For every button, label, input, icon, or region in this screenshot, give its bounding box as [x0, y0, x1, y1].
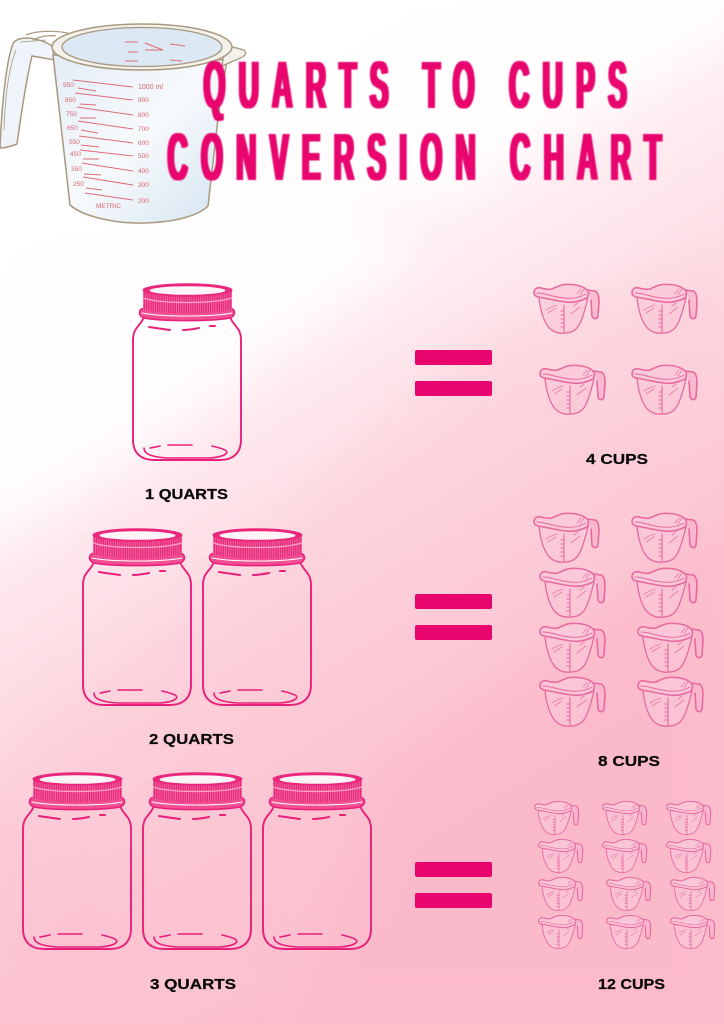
label: 2 quarts: 2 QUARTS [149, 731, 234, 748]
icon: large measuring cup [0, 24, 246, 223]
row 3 [23, 772, 715, 993]
label: 1 quarts: 1 QUARTS [145, 486, 228, 503]
label: 8 cups: 8 CUPS [598, 753, 660, 770]
row 1 [133, 283, 697, 503]
equals sign [415, 862, 492, 908]
measurement markings: 450 [70, 151, 81, 158]
equals sign [415, 594, 492, 640]
label: 4 cups: 4 CUPS [586, 451, 648, 468]
title: CONVERSION CHART [168, 119, 661, 194]
icons: two jars [83, 528, 311, 705]
row 2 [83, 513, 703, 770]
measurement markings: 900 [138, 97, 149, 104]
icons: twelve cups [535, 802, 715, 949]
title: QUARTS TO CUPS [204, 47, 627, 122]
title [168, 47, 661, 194]
measurement markings: 250 [73, 181, 84, 188]
measurement markings: 600 [138, 140, 149, 147]
equals sign [415, 350, 492, 396]
measurement markings: 500 [138, 153, 149, 160]
measurement markings: 650 [67, 125, 78, 132]
measurement markings: 950 [63, 82, 74, 89]
measurement markings: 1000 ml [138, 84, 163, 91]
measurement markings: METRIC [96, 203, 121, 210]
icons: four cups [534, 284, 697, 414]
measurement markings: 400 [138, 168, 149, 175]
measurement markings: 550 [69, 139, 80, 146]
label: 12 cups: 12 CUPS [598, 976, 665, 993]
measurement markings: 750 [66, 111, 77, 118]
icon: one jar [133, 283, 241, 460]
measurement markings: 300 [138, 182, 149, 189]
measurement markings: 350 [71, 166, 82, 173]
measurement markings: 700 [138, 126, 149, 133]
measurement markings: 850 [65, 97, 76, 104]
icons: three jars [23, 772, 371, 949]
icons: eight cups [534, 513, 703, 726]
measurement markings: 800 [138, 112, 149, 119]
label: 3 quarts: 3 QUARTS [150, 976, 236, 993]
measurement markings: 200 [138, 198, 149, 205]
measurement markings [63, 42, 185, 210]
